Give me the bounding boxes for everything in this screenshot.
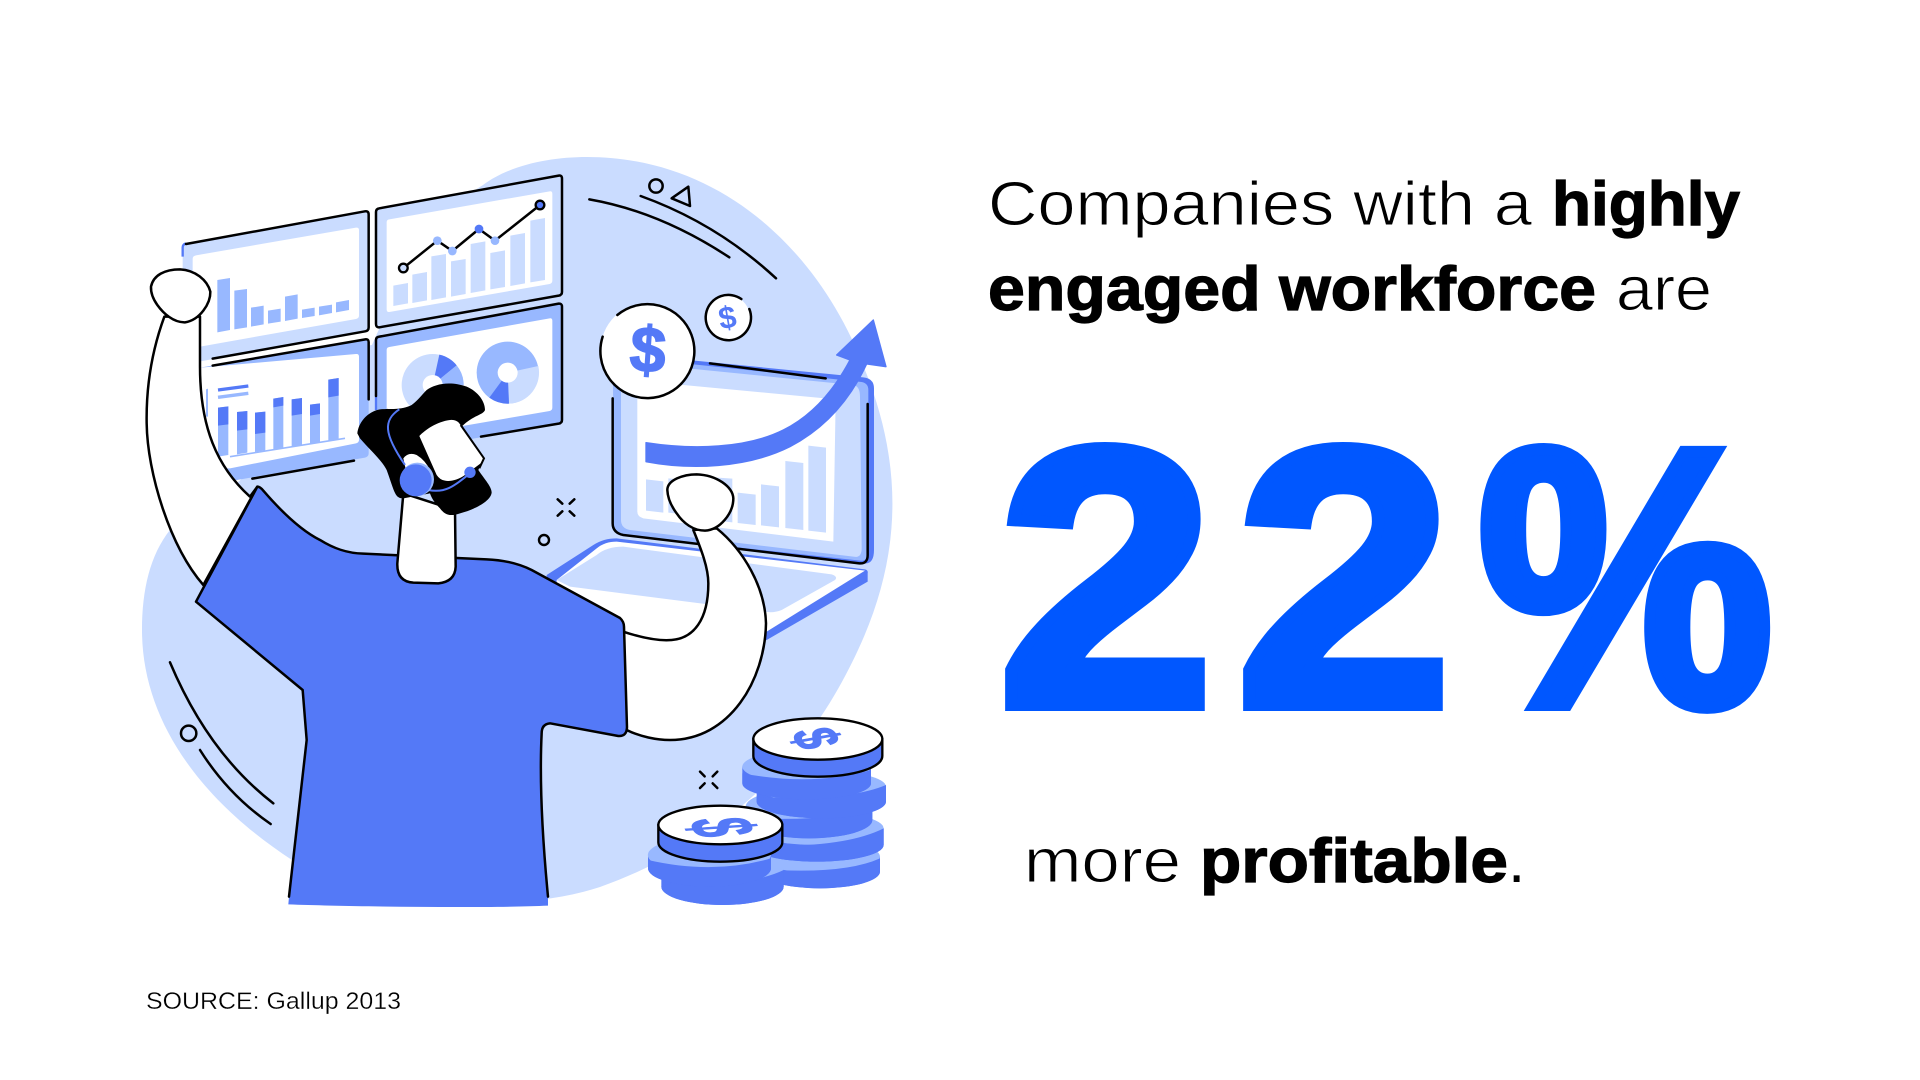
source note: SOURCE: Gallup 2013 — [146, 988, 401, 1015]
raised left arm — [147, 317, 257, 585]
panel: top-left bar chart screen — [183, 211, 369, 364]
closing text — [1024, 827, 1525, 896]
decorative marks lower left — [170, 662, 273, 824]
t-shirt — [196, 487, 627, 907]
neck — [397, 493, 456, 583]
key statistic: 22% — [998, 372, 1774, 783]
decorative marks and arcs upper right — [558, 179, 776, 516]
coin: large dollar: $ — [628, 313, 668, 387]
head with hair and beard — [357, 383, 492, 515]
icon: sparkle — [700, 772, 717, 788]
top coin: $ — [777, 723, 855, 753]
background blob — [142, 157, 892, 903]
key statistic: 22%: 2 — [998, 372, 1214, 783]
growth arrow — [646, 320, 886, 466]
right arm — [623, 528, 766, 740]
ear — [403, 454, 430, 473]
heading text — [988, 170, 1741, 324]
closing text: more — [1024, 827, 1181, 896]
heading text: are — [1616, 255, 1712, 324]
illustration: dashboard screens — [183, 176, 562, 487]
heading text: engaged workforce — [988, 255, 1596, 324]
small ring beside laptop — [539, 535, 549, 545]
key statistic: 22%: % — [1478, 372, 1774, 783]
illustration: person — [147, 269, 766, 907]
face — [419, 420, 484, 481]
illustration: laptop — [547, 295, 886, 660]
coin stack: large — [742, 718, 886, 888]
top coin — [753, 718, 882, 777]
laptop base — [547, 538, 868, 660]
right fist — [667, 474, 733, 531]
closing text: . — [1508, 827, 1525, 896]
key statistic: 22%: 2 — [1236, 372, 1452, 783]
coin stack: small — [648, 806, 784, 905]
panel: bottom-left stacked bar screen — [187, 339, 369, 487]
coin: small dollar: $ — [716, 299, 739, 337]
coin stacks — [648, 718, 886, 905]
heading text: Companies with a — [988, 170, 1533, 239]
coin: large dollar — [600, 303, 695, 398]
panel: top-right line chart screen — [376, 176, 562, 327]
panel: bottom-right donut chart screen — [376, 304, 562, 455]
line chart series — [399, 201, 544, 272]
donut chart one — [402, 354, 464, 416]
coin: small dollar — [705, 295, 751, 340]
headset — [388, 409, 476, 496]
heading text: highly — [1552, 170, 1741, 239]
closing text: profitable — [1200, 827, 1508, 896]
left fist — [151, 269, 210, 322]
laptop screen — [613, 353, 874, 563]
donut chart two — [477, 342, 539, 404]
icon: sparkle — [558, 499, 574, 516]
top coin: $ — [668, 815, 773, 840]
